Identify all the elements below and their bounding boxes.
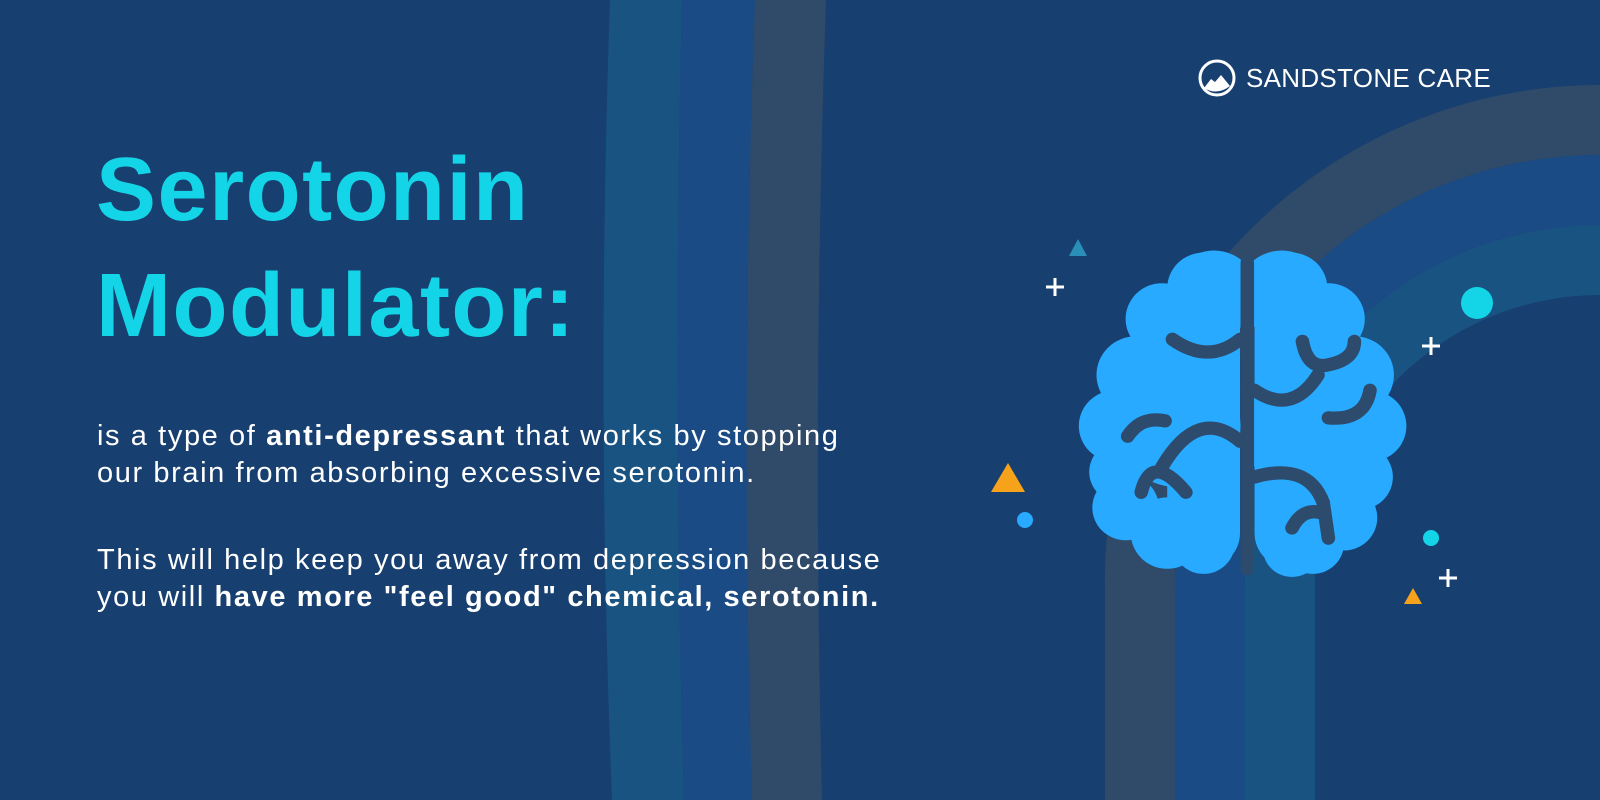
body text <box>97 420 881 613</box>
title: Modulator: <box>96 256 576 356</box>
logo: SANDSTONE CARE <box>1246 63 1491 93</box>
icon: plus <box>1422 337 1440 355</box>
paragraph 2 <box>97 544 881 613</box>
paragraph 2: This will help keep you away from depression because <box>97 544 881 576</box>
paragraph 1: our brain from absorbing excessive serotonin. <box>97 457 756 489</box>
logo <box>1198 60 1491 96</box>
icon: plus <box>1439 569 1457 587</box>
paragraph 1: is a type of anti-depressant that works by stopping <box>97 420 839 452</box>
icon: plus <box>1046 278 1064 296</box>
icon: circle cyan <box>1461 287 1493 319</box>
icon: logo mountain circle <box>1198 60 1236 96</box>
title: Serotonin <box>96 140 530 240</box>
icon: circle blue <box>1017 512 1033 528</box>
decorations <box>991 239 1493 604</box>
paragraph 2: you will have more "feel good" chemical, serotonin. <box>97 581 880 613</box>
icon: triangle orange <box>991 463 1025 492</box>
icon: triangle orange small <box>1404 588 1422 604</box>
icon: brain <box>1078 250 1406 577</box>
title <box>96 140 576 356</box>
icon: triangle teal <box>1069 239 1087 256</box>
paragraph 1 <box>97 420 839 489</box>
icon: circle cyan small <box>1423 530 1439 546</box>
